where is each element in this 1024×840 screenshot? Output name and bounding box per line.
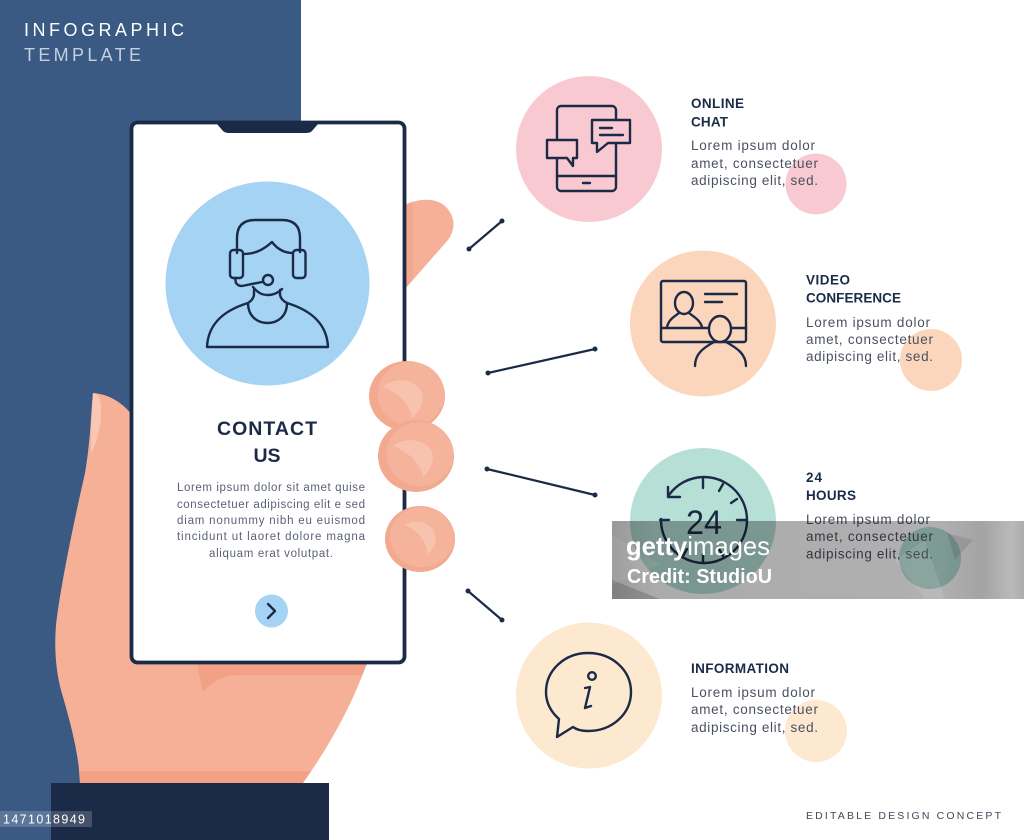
- body text: diam nonummy nibh eu euismod: [177, 515, 365, 527]
- heading: contact us: [217, 418, 317, 467]
- body text: consectetuer adipiscing elit e sed: [177, 499, 365, 511]
- text: online chat: ONLINE: [691, 96, 744, 111]
- panel: video conference: [630, 250, 962, 396]
- phone: [132, 122, 404, 662]
- watermark: [612, 521, 1024, 599]
- panel: blue background: [0, 0, 301, 840]
- icon: fingers over phone: [369, 361, 455, 572]
- watermark credit text: Credit: StudioU: [627, 566, 772, 588]
- panel: online chat: [516, 76, 846, 222]
- text: 24 hours: Lorem ipsum dolor: [806, 512, 930, 527]
- icon: top finger behind phone: [404, 200, 454, 289]
- icon: agent with headset: [207, 220, 328, 347]
- arrow button: [255, 594, 288, 628]
- body text: tincidunt ut laoret dolore magna: [177, 531, 366, 543]
- footer label: EDITABLE DESIGN CONCEPT: [806, 810, 1002, 822]
- text: information: INFORMATION: [691, 661, 789, 676]
- sleeve: [51, 783, 329, 840]
- text: 24 hours: amet, consectetuer: [806, 529, 934, 544]
- text: video conference: VIDEO: [806, 272, 850, 288]
- body text: aliquam erat volutpat.: [209, 548, 333, 560]
- icon: phone with chat bubbles: [547, 106, 630, 191]
- icon: video call: [661, 281, 746, 366]
- heading: contact us: CONTACT: [217, 418, 317, 440]
- title: [24, 20, 184, 65]
- text: 24 hours: HOURS: [806, 488, 856, 503]
- hand: [55, 393, 367, 783]
- image id tag: 1471018949: [3, 812, 85, 826]
- text: online chat: CHAT: [691, 114, 729, 130]
- panel: information: [516, 622, 847, 768]
- text: 24 hours: 24: [806, 470, 822, 485]
- connector lines: [466, 218, 598, 622]
- icon: 24 hour clock: 24: [686, 504, 722, 542]
- title: INFOGRAPHIC: [24, 20, 184, 40]
- heading: contact us: US: [253, 445, 281, 467]
- text: information: Lorem ipsum dolor: [691, 685, 816, 700]
- panel: 24 hours: [630, 448, 961, 594]
- icon: information speech bubble: [546, 653, 631, 737]
- text: video conference: Lorem ipsum dolor: [806, 315, 930, 330]
- phone notch: [217, 124, 318, 133]
- text: online chat: adipiscing elit, sed.: [691, 173, 818, 188]
- text: video conference: adipiscing elit, sed.: [806, 349, 933, 364]
- text: video conference: CONFERENCE: [806, 290, 901, 306]
- title: TEMPLATE: [24, 45, 141, 65]
- text: online chat: [691, 96, 818, 188]
- icon: 24 hour clock: [660, 477, 747, 563]
- watermark brand text: gettyimages: [626, 531, 770, 561]
- text: online chat: amet, consectetuer: [691, 156, 818, 171]
- body text: [177, 482, 366, 560]
- text: information: adipiscing elit, sed.: [691, 720, 818, 735]
- text: 24 hours: [806, 470, 934, 562]
- text: online chat: Lorem ipsum dolor: [691, 138, 816, 153]
- text: information: amet, consectetuer: [691, 702, 818, 717]
- text: video conference: amet, consectetuer: [806, 332, 934, 347]
- text: 24 hours: adipiscing elit, sed.: [806, 546, 933, 562]
- contact avatar circle: [166, 182, 370, 386]
- body text: Lorem ipsum dolor sit amet quise: [177, 482, 365, 494]
- text: information: [691, 661, 818, 735]
- text: video conference: [806, 272, 934, 364]
